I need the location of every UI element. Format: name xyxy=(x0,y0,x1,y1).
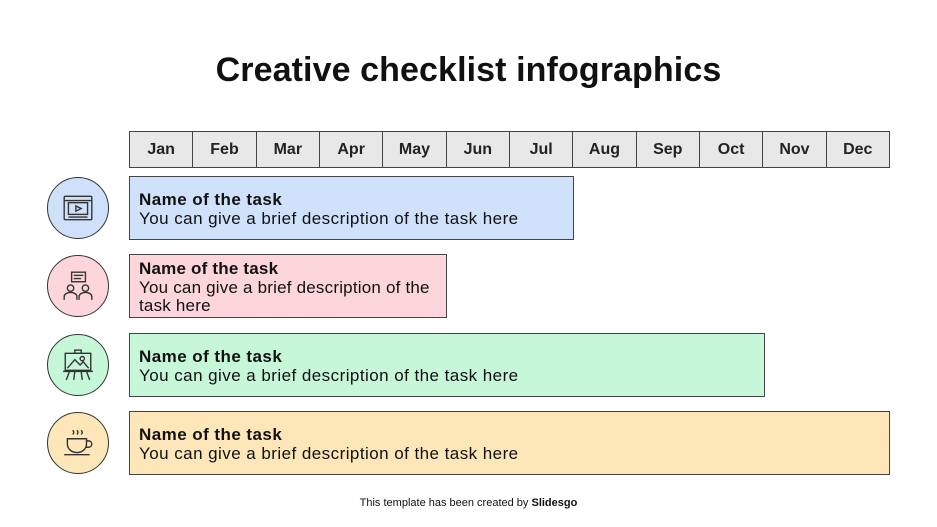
month header: Sep xyxy=(653,141,682,158)
icon: presentation xyxy=(47,334,109,396)
month header: Mar xyxy=(274,141,302,158)
icon: people chat xyxy=(47,255,109,317)
bar: task 2: Name of the task xyxy=(139,259,278,278)
month header: Oct xyxy=(718,141,744,158)
bar: task 2: task here xyxy=(139,296,211,315)
bar: task 3 xyxy=(129,333,765,397)
month header xyxy=(129,131,890,168)
icon: coffee cup xyxy=(47,412,109,474)
bar: task 1 xyxy=(129,176,574,240)
icon: video xyxy=(47,177,109,239)
title: Creative checklist infographics xyxy=(216,51,721,89)
month header: Jan xyxy=(147,141,175,158)
month header: Apr xyxy=(337,141,365,158)
bar: task 1: You can give a brief description of the task here xyxy=(139,208,519,228)
bar: task 4 xyxy=(129,411,890,475)
month header: May xyxy=(399,141,430,158)
bar: task 4: Name of the task xyxy=(139,425,282,444)
month header: Aug xyxy=(589,141,620,158)
bar: task 4: You can give a brief description of the task here xyxy=(139,444,519,462)
bar: task 3: You can give a brief description of the task here xyxy=(139,366,519,384)
month header: Jul xyxy=(530,141,553,158)
month header: Feb xyxy=(210,141,239,158)
month header: Jun xyxy=(464,141,492,158)
bar: task 1: Name of the task xyxy=(139,190,282,209)
bar: task 3: Name of the task xyxy=(139,347,282,366)
footer: This template has been created by Slidesgo xyxy=(360,497,577,509)
month header: Dec xyxy=(843,141,872,158)
bar: task 2: You can give a brief description of the xyxy=(139,278,430,296)
bar: task 2 xyxy=(129,254,447,318)
month header: Nov xyxy=(779,141,810,158)
